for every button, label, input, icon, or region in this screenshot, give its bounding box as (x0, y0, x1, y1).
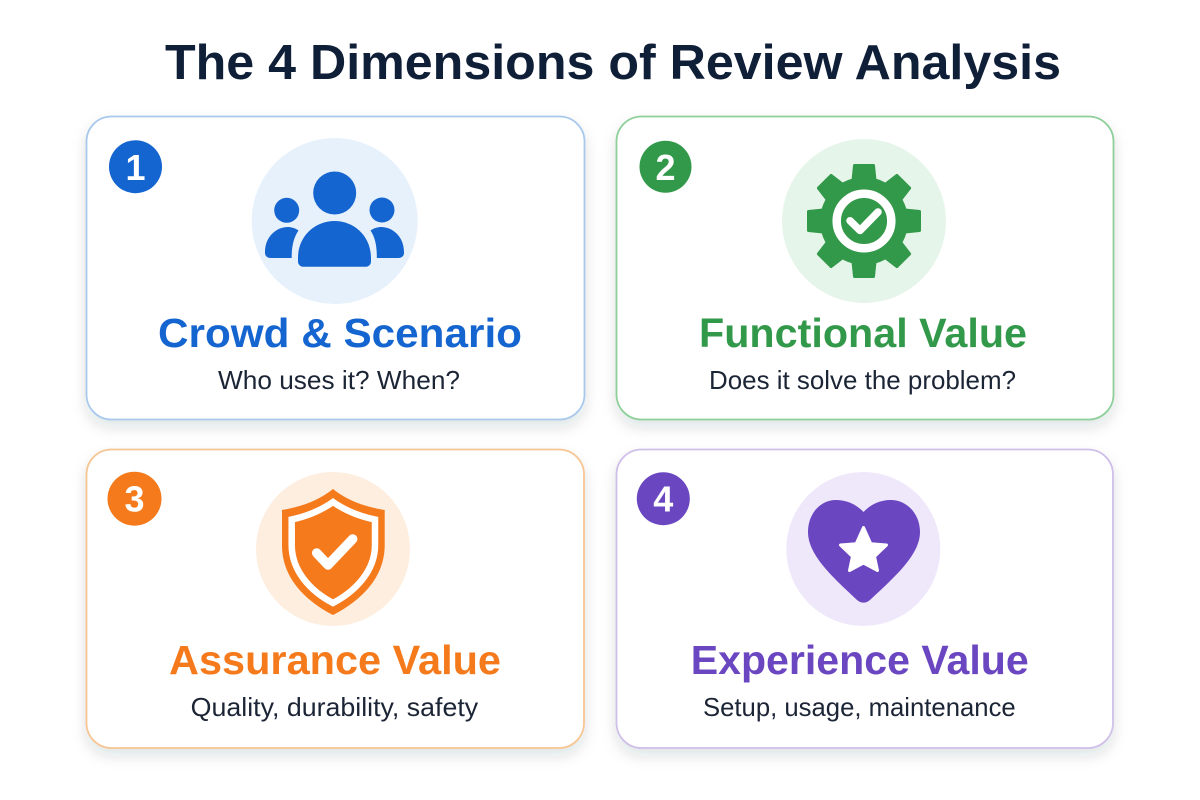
icon: group of people (252, 138, 418, 304)
number badge 2: 2 (655, 147, 676, 188)
panel: functional value (616, 116, 1114, 420)
heading: Crowd & Scenario: Crowd & Scenario (158, 310, 522, 356)
card 1 background (86, 116, 584, 420)
number badge 4: 4 (653, 478, 673, 520)
number badge 4 (637, 472, 690, 525)
card 3 background (86, 450, 584, 748)
icon: heart with star (786, 472, 940, 626)
number badge 1 (109, 140, 162, 193)
icon: gear with check (782, 139, 946, 303)
heading: Functional Value: Functional Value (699, 310, 1027, 356)
description: Quality, durability, safety: Quality, durability, safety (191, 692, 478, 722)
card 2 background (616, 116, 1114, 420)
description: Does it solve the problem?: Does it solve the problem? (709, 365, 1016, 395)
description: Who uses it? When?: Who uses it? When? (218, 365, 460, 395)
panel: crowd and scenario (86, 116, 584, 420)
description: Setup, usage, maintenance: Setup, usage, maintenance (703, 692, 1016, 722)
number badge 2 (640, 141, 692, 193)
heading: Experience Value: Experience Value (691, 637, 1029, 683)
icon: shield with check (256, 472, 410, 626)
title: The 4 Dimensions of Review Analysis (165, 36, 1061, 90)
panel: experience value (616, 450, 1113, 748)
heading: Assurance Value: Assurance Value (169, 637, 501, 683)
number badge 3: 3 (124, 478, 145, 520)
card 4 background (616, 450, 1113, 748)
panel: assurance value (86, 450, 584, 748)
number badge 3 (108, 472, 162, 526)
number badge 1: 1 (125, 147, 146, 188)
